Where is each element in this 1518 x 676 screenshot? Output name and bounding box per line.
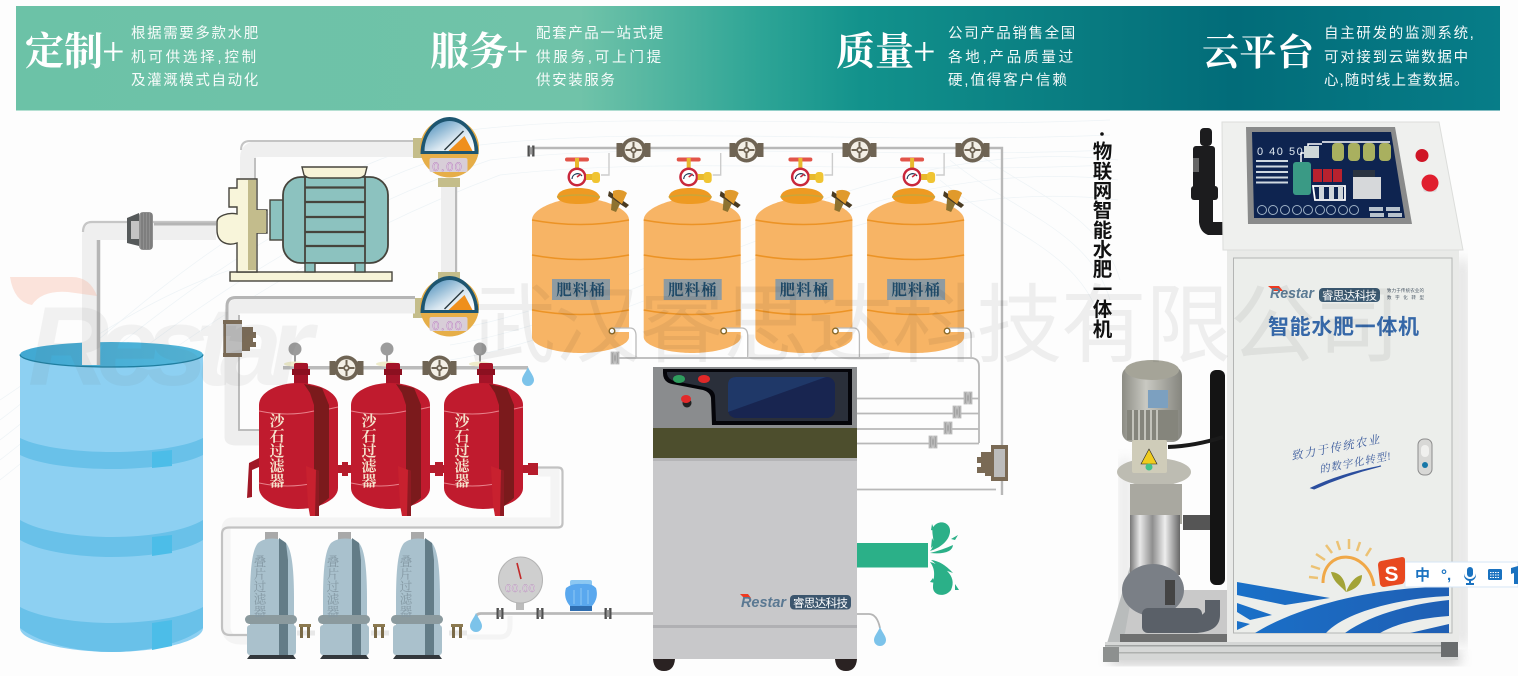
outlet green hose with splash: [857, 522, 959, 595]
water storage tank: [20, 342, 203, 652]
vertical product title: 体: [1093, 299, 1113, 321]
banner item: custom: +: [102, 29, 125, 74]
slogan: [1290, 433, 1393, 476]
screen process diagram: [1256, 142, 1402, 217]
sand filter 1: 过: [269, 442, 285, 460]
cabinet control panel: [653, 367, 857, 428]
disc filter 2: 器: [327, 605, 340, 619]
product photo: fertigation machine: [1103, 122, 1466, 664]
sand filter 1: 滤: [269, 457, 285, 475]
door handle: [1418, 439, 1432, 475]
vertical product title: 肥: [1093, 259, 1112, 281]
cabinet logo: 致力于传统农业的: [1387, 287, 1424, 294]
red buttons: [1416, 149, 1438, 192]
control cabinet: [653, 367, 857, 671]
cabinet logo: 睿思达科技: [1322, 288, 1378, 302]
manifold gauges: [284, 342, 491, 366]
disc filter 3: [391, 532, 443, 659]
water drop: [470, 613, 482, 632]
disc filter 3: 片: [400, 566, 412, 582]
sand filter 1: 沙: [269, 412, 286, 430]
pipe from pump to pressure gauge: [241, 141, 418, 180]
toolbar microphone: [1464, 567, 1476, 585]
door wave graphic and sun logo: [1237, 539, 1449, 633]
sand filter 2: 沙: [361, 412, 378, 430]
black riser pipe: [1168, 370, 1225, 585]
vertical product title: 能: [1093, 220, 1113, 242]
pressure gauge 2: [420, 276, 479, 336]
sand filter 1: 石: [269, 428, 285, 445]
vertical product title: [1093, 132, 1113, 341]
disc filter 2: 片: [327, 566, 339, 582]
sand filter 1: 器: [269, 473, 285, 490]
disc filter fittings: [297, 616, 510, 638]
sand filter 2: [351, 363, 430, 516]
vertical product title: 机: [1093, 319, 1113, 341]
sand filter 2: 石: [361, 428, 377, 445]
disc filter 3: 过: [400, 579, 413, 594]
sand filter 3: 过: [454, 442, 470, 460]
disc filter 1: 片: [254, 566, 266, 582]
disc filter 2: 滤: [327, 592, 340, 606]
banner item: cloud platform: 云平台: [1202, 32, 1316, 74]
slogan underline: [1311, 466, 1381, 489]
meter pipe: [476, 608, 655, 619]
banner item: quality: 硬,值得客户信赖: [948, 72, 1069, 89]
sand filter 2: 滤: [361, 457, 377, 475]
sand filter 3: [444, 363, 523, 516]
fertilizer tank 4: 肥料桶: [891, 280, 941, 299]
stainless frame: [1103, 560, 1458, 662]
sand filter manifold: [283, 342, 528, 380]
sand filter 2: 过: [361, 442, 377, 460]
floor plate: [1125, 590, 1230, 637]
sand filter 2: 器: [361, 473, 377, 490]
connectors between sand filters: [338, 462, 538, 476]
disc filter 1: 滤: [254, 592, 267, 606]
fertilizer tank 1: 肥料桶: [556, 280, 606, 299]
water pump: [217, 167, 392, 281]
bottom fertilizer pipes: [612, 352, 996, 490]
disc filter 1: 叠: [254, 555, 267, 569]
cabinet logo: Restar: [741, 594, 787, 611]
banner item: quality: +: [913, 29, 936, 74]
disc filter 3: 叠: [400, 555, 413, 569]
screen process diagram: 0 40 50: [1257, 146, 1304, 158]
pressure gauge 1: [420, 117, 479, 178]
banner item: cloud platform: [1202, 25, 1476, 89]
pipe fitting: inlet connector: [127, 212, 153, 250]
pump base: [230, 272, 392, 281]
vertical product title: 智: [1093, 200, 1112, 222]
fertilizer tank 3: 肥料桶: [780, 280, 829, 299]
disc filter 3: 器: [400, 605, 413, 619]
banner item: quality: 公司产品销售全国: [948, 24, 1077, 42]
watermark: Restar logo: Restar: [28, 284, 318, 409]
cabinet door: [1234, 258, 1452, 633]
banner item: service: 供服务,可上门提: [536, 49, 664, 66]
blue filter valve: [565, 580, 597, 611]
sand filter 3: 滤: [454, 457, 470, 475]
cabinet top console: [1222, 122, 1463, 250]
vertical pump: [1117, 360, 1220, 633]
cabinet logo: Restar: [1270, 285, 1315, 302]
vertical product title: 网: [1093, 180, 1112, 202]
flow meter: 00.00: [505, 583, 536, 595]
inlet pipe: [83, 222, 216, 365]
input method toolbar: [1378, 557, 1518, 587]
slogan: 致力于传统农业: [1290, 433, 1382, 463]
disc filter 2: [318, 532, 370, 659]
toolbar punctuation: °,: [1441, 567, 1451, 584]
fertilizer tank 3: [755, 153, 859, 357]
fertilizer tank 2: [644, 153, 748, 357]
drain pipe: [857, 614, 886, 646]
fertilizer tank 4: [867, 153, 971, 357]
pump housing: [217, 179, 267, 272]
disc filter 1: 器: [254, 605, 267, 619]
vertical product title: 物: [1093, 141, 1112, 163]
water drop: [522, 367, 534, 386]
banner item: custom: 根据需要多款水肥: [131, 25, 260, 42]
disc filter 2: 过: [327, 579, 340, 594]
pipe from gauge to sand filters: [227, 298, 415, 438]
banner: [16, 6, 1500, 110]
banner item: cloud platform: 心,随时线上查数据。: [1324, 72, 1470, 89]
slogan: 的数字化转型!: [1318, 450, 1393, 476]
banner item: quality: 各地,产品质量过: [948, 49, 1076, 66]
disc filter 1: 过: [254, 579, 267, 594]
toolbar skin: [1511, 566, 1518, 584]
cabinet lower body: [1227, 248, 1459, 642]
touch screen: [1246, 127, 1412, 224]
sand filter 3: 石: [454, 428, 470, 445]
toolbar keyboard: [1488, 569, 1502, 580]
banner item: custom: [25, 25, 260, 89]
sand filter 3: 沙: [454, 412, 471, 430]
pipe from sand filters to disc filters: [222, 468, 562, 640]
banner item: cloud platform: 自主研发的监测系统,: [1324, 25, 1476, 42]
cabinet olive band: [653, 428, 857, 458]
banner item: service: +: [506, 29, 529, 74]
top fertilizer manifold: [528, 138, 1002, 495]
banner item: cloud platform: 可对接到云端数据中: [1324, 49, 1470, 66]
fertilizer tank 1: [532, 153, 636, 357]
vertical product title: 一: [1093, 279, 1112, 301]
cabinet logo: [1268, 285, 1424, 302]
flow meter: [498, 557, 542, 610]
disc filter 3: 滤: [400, 592, 413, 606]
vertical product title: 联: [1093, 161, 1113, 183]
banner item: service: [430, 25, 665, 89]
black air valve: [1191, 128, 1223, 235]
disc filter 1: [245, 532, 297, 659]
cabinet logo: 睿思达科技: [793, 596, 848, 610]
sand filter 1: [247, 363, 338, 516]
pressure gauge 2: 0.00: [432, 319, 464, 333]
check valve: [223, 320, 256, 357]
banner item: quality: 质量: [836, 31, 914, 74]
sand filter 3: 器: [454, 473, 470, 490]
banner item: custom: 定制: [25, 31, 103, 74]
vertical product title: 水: [1093, 240, 1113, 262]
banner item: custom: 及灌溉模式自动化: [131, 72, 260, 89]
cabinet logo: 数 字 化 转 型: [1387, 294, 1424, 301]
cabinet logo: [740, 594, 851, 611]
toolbar chinese indicator: 中: [1415, 567, 1430, 584]
cabinet title: 智能水肥一体机: [1268, 316, 1419, 339]
motor: [270, 167, 388, 272]
banner item: custom: 机可供选择,控制: [131, 49, 259, 66]
toolbar logo: S: [1384, 563, 1399, 586]
banner item: service: 服务: [430, 31, 508, 74]
cabinet wheels: [653, 659, 857, 671]
fertilizer tank 2: 肥料桶: [668, 280, 717, 299]
banner item: service: 配套产品一站式提: [536, 25, 665, 42]
banner item: service: 供安装服务: [536, 72, 616, 89]
non-return valve right: [977, 445, 1008, 481]
pressure pipe between gauges: [413, 138, 460, 318]
disc filter 2: 叠: [327, 555, 340, 569]
banner item: quality: [836, 24, 1077, 89]
watermark: company name: 武汉睿思达科技有限公司: [470, 278, 1400, 374]
pressure gauge 1: 0.00: [432, 160, 464, 174]
